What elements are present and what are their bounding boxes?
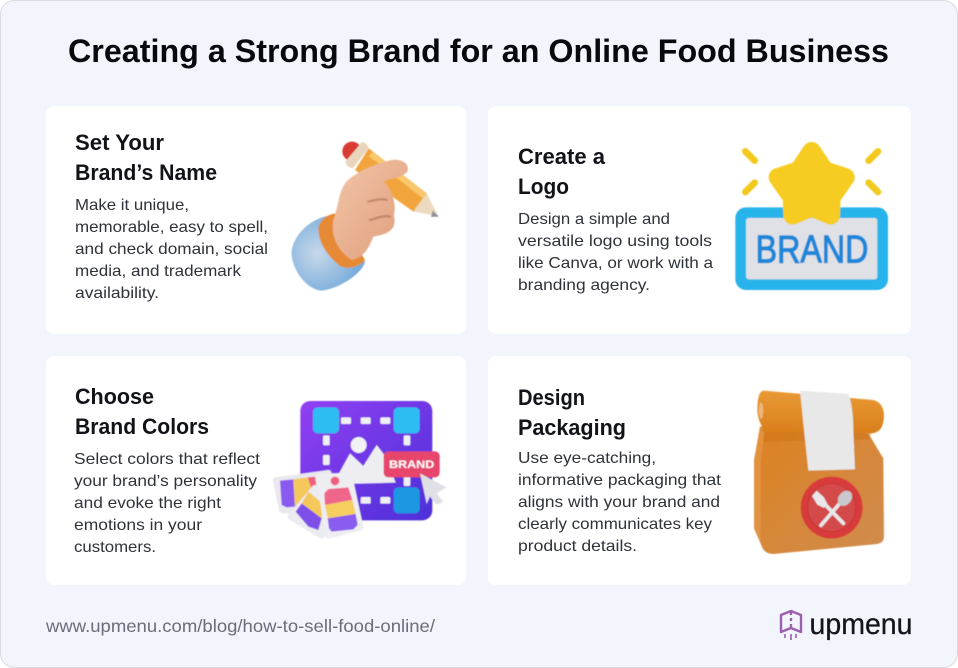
- text: name advice: availability.: [75, 285, 159, 302]
- text: logo advice: [518, 211, 713, 294]
- icon: brand badge with star: BRAND: [756, 228, 868, 271]
- icon: upmenu book mark: [781, 611, 801, 640]
- heading: choose brand colors: Brand Colors: [75, 414, 209, 439]
- logo: upmenu: [781, 608, 912, 641]
- panel: set your brand's name: [46, 106, 466, 334]
- heading: create a logo: [518, 144, 606, 199]
- text: colors advice: Select colors that reflect: [74, 451, 261, 468]
- text: colors advice: and evoke the right: [74, 495, 222, 512]
- icon: brand badge with star: [735, 151, 888, 290]
- text: packaging advice: Use eye-catching,: [518, 450, 656, 467]
- panel: create a logo: [488, 106, 911, 334]
- text: name advice: media, and trademark: [75, 263, 242, 280]
- heading: design packaging: [518, 385, 626, 440]
- icon: design board with color swatches: [276, 401, 447, 535]
- text: logo advice: Design a simple and: [518, 211, 670, 228]
- text: packaging advice: informative packaging that: [518, 472, 722, 489]
- text: packaging advice: aligns with your brand and: [518, 494, 720, 511]
- icon: hand holding pencil: [292, 142, 439, 291]
- text: logo advice: versatile logo using tools: [518, 233, 712, 250]
- text: colors advice: [74, 451, 261, 556]
- text: colors advice: customers.: [74, 539, 156, 556]
- source url: www.upmenu.com/blog/how-to-sell-food-online/: [45, 616, 435, 636]
- text: colors advice: your brand’s personality: [74, 473, 257, 490]
- icon: design board with color swatches: BRAND: [389, 459, 434, 471]
- text: name advice: memorable, easy to spell,: [75, 219, 268, 236]
- wordmark: upmenu: [810, 608, 912, 641]
- heading: choose brand colors: Choose: [75, 384, 154, 409]
- heading: choose brand colors: [75, 384, 209, 439]
- heading: set your brand's name: Brand’s Name: [75, 160, 217, 185]
- title: Creating a Strong Brand for an Online Food Business: [68, 33, 889, 69]
- text: name advice: and check domain, social: [75, 241, 268, 258]
- text: packaging advice: product details.: [518, 538, 637, 555]
- panel: design packaging: [488, 356, 911, 585]
- heading: create a logo: Create a: [518, 144, 606, 169]
- text: logo advice: branding agency.: [518, 277, 650, 294]
- text: packaging advice: clearly communicates key: [518, 516, 712, 533]
- heading: set your brand's name: [75, 130, 217, 185]
- heading: create a logo: Logo: [518, 174, 569, 199]
- heading: design packaging: Packaging: [518, 415, 626, 440]
- text: name advice: [75, 197, 268, 302]
- heading: set your brand's name: Set Your: [75, 130, 164, 155]
- text: packaging advice: [518, 450, 722, 555]
- text: logo advice: like Canva, or work with a: [518, 255, 713, 272]
- text: colors advice: emotions in your: [74, 517, 203, 534]
- text: name advice: Make it unique,: [75, 197, 189, 214]
- icon: food delivery bag: [754, 391, 884, 554]
- panel: choose brand colors: [46, 356, 466, 585]
- heading: design packaging: Design: [518, 385, 585, 410]
